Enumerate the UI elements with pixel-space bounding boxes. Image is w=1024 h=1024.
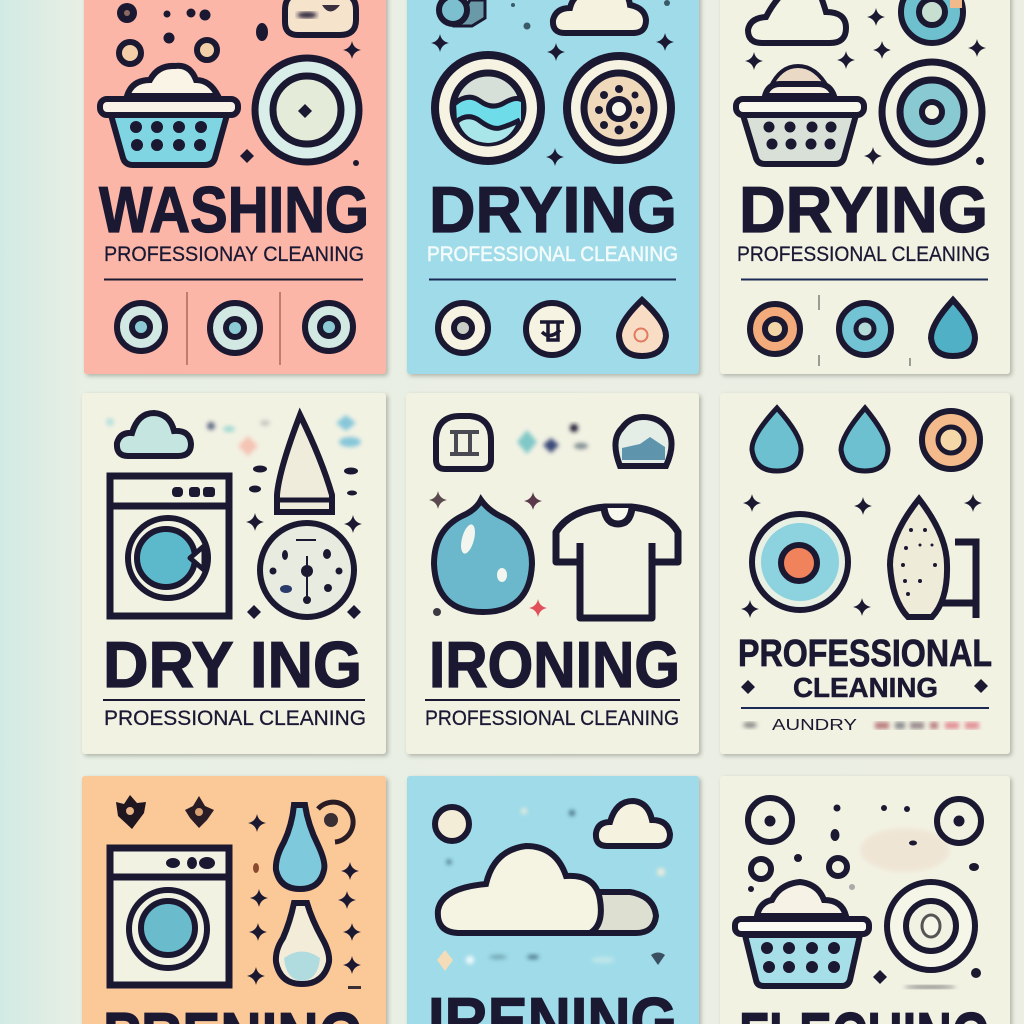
subheading: PROFESSIONAL CLEANING (425, 707, 679, 730)
subheading: PROFESSIONAL CLEANING (737, 243, 990, 266)
icon: cloud box (285, 0, 356, 35)
icon: drum (887, 882, 975, 970)
icon: ring bubbles (119, 40, 217, 64)
icon: top stars (116, 795, 214, 829)
panel: drying cream (720, 0, 1010, 374)
icon: sparkles (745, 8, 986, 165)
icon: washer drum (255, 58, 359, 162)
icon: orange ring (922, 411, 980, 469)
icon: target disc (752, 514, 848, 610)
icon: top discs (748, 798, 981, 879)
icon: small cloud (596, 801, 670, 846)
icon: iron (277, 415, 332, 512)
icon: iron (890, 499, 976, 618)
soft stain (860, 828, 950, 872)
subheading: PROESSIONAL CLEANING (104, 707, 366, 730)
icon: drum (882, 62, 982, 162)
icon: sharp specks (437, 950, 665, 971)
panel: ironing (406, 393, 699, 754)
icon: laundry basket (736, 66, 864, 164)
icon: cloud (748, 0, 846, 43)
panel: ironing blue (407, 776, 699, 1024)
subheading: PROFESSIONAY CLEANING (104, 243, 364, 266)
icon: side diamonds (741, 679, 988, 694)
subheading: PROFESSIONAL CLEANING (427, 243, 678, 266)
icon: small bubbles (117, 3, 361, 166)
icon: top disc (901, 0, 963, 43)
icons: discs and drop (438, 300, 666, 356)
icon: sparkles (741, 494, 982, 618)
icon: cloud (553, 0, 646, 33)
icon: dome badge (615, 417, 672, 466)
icon: top circle (439, 0, 485, 26)
icon: corner ring (318, 802, 353, 842)
icon: water drop (434, 500, 532, 612)
icon: square badge (436, 416, 491, 469)
icon: sparkles (429, 491, 547, 617)
icon: two drops (752, 408, 888, 471)
panel: pressing orange (82, 776, 386, 1024)
icon: dotted drum (567, 56, 671, 160)
footer dots (743, 722, 979, 729)
icon: diamonds (517, 424, 588, 454)
heading: drying: DRYING (429, 173, 677, 246)
icon: washing machine (110, 476, 229, 616)
icons: discs and drop (750, 300, 975, 356)
heading: drying: DRYING (739, 173, 988, 246)
heading: washing: WASHING (99, 173, 369, 246)
icon: washing machine (110, 848, 229, 985)
icon: t-shirt (556, 507, 678, 618)
heading: dry ing: DRY ING (103, 628, 362, 701)
icon: dotted dial (260, 523, 354, 617)
icon: cloud (117, 413, 191, 456)
icon: sparkles (247, 814, 361, 989)
panel: washing (84, 0, 386, 374)
panel: drying blue (407, 0, 699, 374)
icon: sparkles (431, 0, 674, 166)
icon: specks (748, 804, 981, 989)
icon: sparkles and marks (246, 466, 362, 619)
footer text: AUNDRY (772, 717, 857, 734)
icon: laundry basket (100, 66, 238, 165)
heading: ironing: IRONING (429, 628, 680, 701)
icon: drops (276, 805, 329, 984)
panel: fleching cropped (720, 776, 1010, 1024)
icon: wave drum (435, 55, 541, 161)
icon: specks (446, 808, 665, 964)
icons: three discs (117, 303, 353, 353)
panel: professional cleaning (720, 393, 1010, 754)
icon: big cloud (438, 846, 656, 933)
icon: blurred specks (106, 415, 361, 456)
icon: laundry basket (735, 882, 869, 986)
icon: small disc (435, 807, 469, 841)
panel: drying row 2 (82, 393, 386, 754)
heading: cleaning: CLEANING (793, 672, 938, 703)
